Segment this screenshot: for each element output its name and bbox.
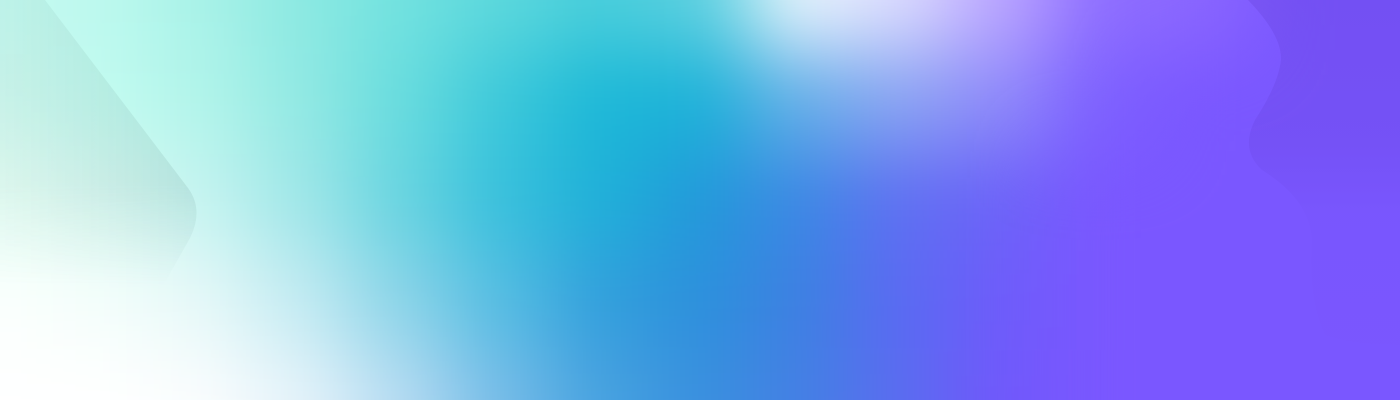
shape: left rounded arrow	[0, 0, 196, 244]
shape: right dark blob	[1248, 0, 1400, 345]
